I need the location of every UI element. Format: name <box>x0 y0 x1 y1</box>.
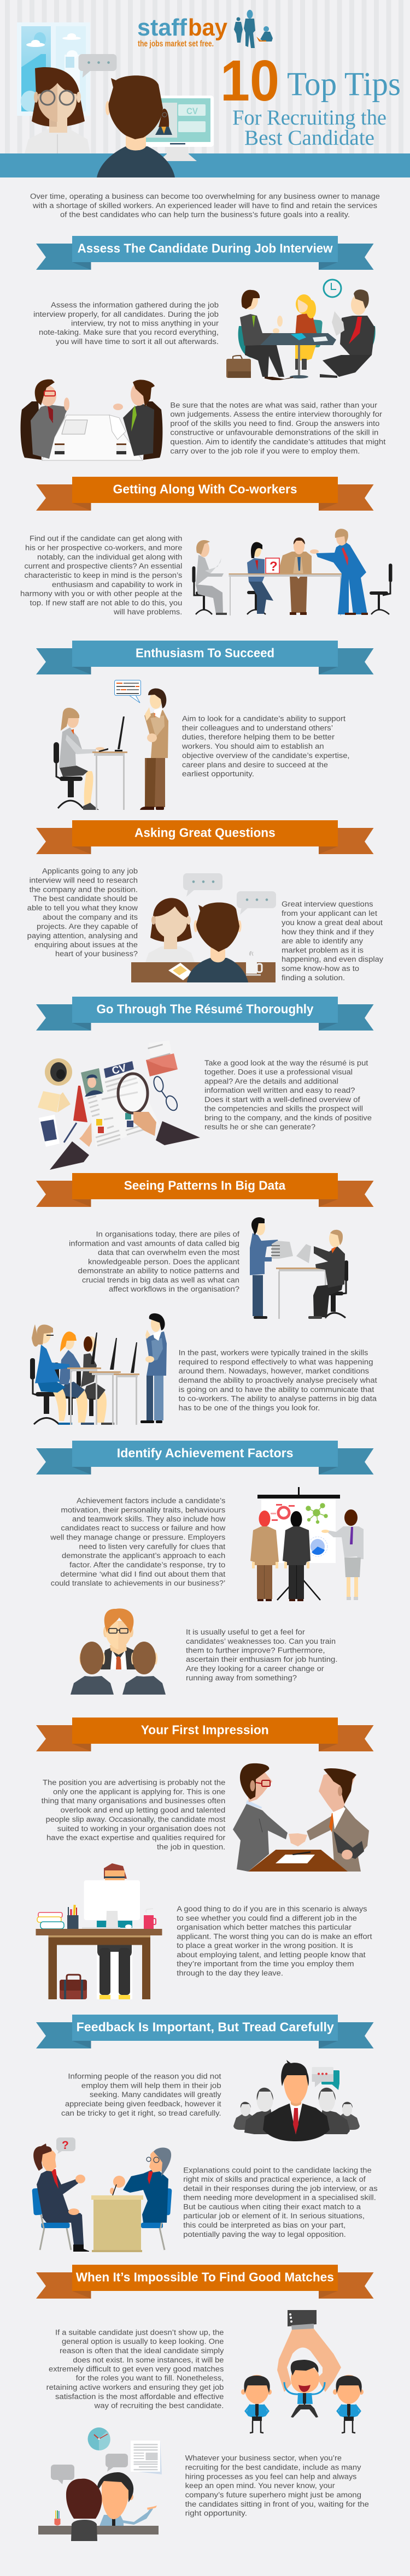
text: aim to look for: their colleagues and to understand others’ <box>182 724 333 732</box>
text: informing people: can be tricky to get it right, so tread carefully. <box>61 2109 221 2117</box>
illustration: two men at a table, top view <box>21 380 162 460</box>
title <box>220 49 401 150</box>
text: take a good look: information well written and easy to read? <box>204 1086 355 1094</box>
text: be sure that the notes: question. Aim to identify the candidate’s attitudes that might <box>170 438 386 446</box>
text: be sure that the notes: Be sure that the notes are what was said, rather than your <box>170 401 378 410</box>
illustration: man handing documents to seated man <box>250 1217 348 1319</box>
chart: green network <box>306 1503 327 1524</box>
text: applicants going to any job <box>27 867 138 958</box>
icon: coffee cup <box>45 1058 72 1086</box>
heading banner: Asking Great Questions: Asking Great Questions <box>134 826 276 840</box>
text: a good thing to do: organisation which better matches this particular <box>177 1923 352 1931</box>
text: whatever your business sector: company’s future superhero might just be among <box>185 2491 361 2499</box>
text: find out if the candidate: top. If new staff are not able to do this, you <box>30 599 182 607</box>
icon: briefcase <box>60 1975 87 1999</box>
text: the position you are advertising: the job in question. <box>157 1843 225 1851</box>
text: informing people: appreciate being given feedback, however it <box>65 2100 221 2108</box>
text: be sure that the notes: own judgements. Assess the entire interview thoroughly for <box>170 410 383 418</box>
text: the position you are advertising: thing that many organisations and businesses often <box>42 1797 225 1805</box>
text: aim to look for: earliest opportunity. <box>182 770 254 778</box>
text: find out if the candidate: enthusiasm and capability to work in <box>52 581 182 589</box>
speech bubble <box>51 2465 74 2484</box>
text: whatever your business sector: hiring processes as you feel can help and always <box>185 2473 357 2480</box>
text: aim to look for: workers. You should aim to establish an <box>181 742 324 750</box>
text: find out if the candidate: Find out if the candidate can get along with <box>30 534 182 543</box>
speech bubble <box>106 2454 128 2472</box>
text: achievement factors include: and teamwork skills. They also include how <box>72 1515 226 1523</box>
heading banner: Identify Achievement Factors <box>36 1441 374 1474</box>
text: great interview questions: how they think and if they <box>282 928 374 936</box>
text: find out if the candidate: notably, can the individual get along with <box>37 553 182 561</box>
text: applicants going to any job: about the company and its <box>43 913 138 921</box>
text: it is usually useful: candidates’ weaknesses too. Can you train <box>186 1637 336 1645</box>
text: in organisations today: information and vast amounts of data called big <box>69 1240 239 1247</box>
text: assess the information <box>33 301 219 346</box>
heading banner: Getting Along With Co-workers <box>36 477 374 511</box>
text: take a good look: appeal? Are the details and additional <box>204 1077 338 1086</box>
text: great interview questions: you know a great deal about <box>282 919 383 927</box>
text: in organisations today: knowledgeable person. Does the applicant <box>88 1258 239 1266</box>
text: if a suitable candidate: satisfaction is the most affordable and effective <box>55 2393 224 2401</box>
text: whatever your business sector: right opportunity. <box>185 2509 247 2518</box>
hero speech bubble <box>79 54 117 78</box>
text: take a good look: together. Does it use a professional visual <box>204 1068 353 1076</box>
text: find out if the candidate: current and prospective clients? An essential <box>24 562 182 570</box>
text: great interview questions: happening, and even display <box>282 955 383 963</box>
title: For Recruiting the <box>232 106 386 129</box>
text: find out if the candidate: his or her prospective co-workers, and more <box>25 544 182 552</box>
hero woman interviewer <box>25 67 90 153</box>
illustration: man with glasses facing two candidates <box>71 1608 166 1695</box>
center person <box>284 2360 325 2418</box>
text: applicants going to any job: enquiring about issues at the <box>34 940 138 949</box>
text: it is usually useful: Are they looking for a career change or <box>186 1665 324 1673</box>
text: applicants going to any job: interview will need to research <box>30 876 138 885</box>
text: the position you are advertising: overlook and end up letting good and talented <box>60 1806 225 1814</box>
text: assess the information: note-taking. Make sure that you record everything, <box>39 328 219 336</box>
chart: blue pie <box>308 1537 327 1556</box>
chairs and lower bodies <box>30 1358 102 1424</box>
text: applicants going to any job: Applicants going to any job <box>42 867 138 875</box>
text: take a good look: results he or she can generate? <box>204 1123 315 1131</box>
text: if a suitable candidate <box>46 2329 224 2409</box>
illustration: man behind monitor at desk <box>36 1863 162 1999</box>
text: a good thing to do: A good thing to do if you are in this scenario is always <box>177 1905 367 1913</box>
icon: magnifier <box>118 1074 148 1116</box>
text: find out if the candidate: will have problems. <box>113 608 182 616</box>
text: explanations could point: potentially paving the way to legal opposition. <box>183 2230 346 2239</box>
icon: document <box>131 2441 162 2474</box>
text: a good thing to do: through to the day they leave. <box>177 1969 283 1977</box>
icon: stack of books <box>37 1912 64 1929</box>
text: great interview questions: from your applicant can let <box>282 909 377 917</box>
text: it is usually useful: them to further improve? Furthermore, <box>186 1646 325 1655</box>
illustration: team with leader <box>233 2060 360 2141</box>
text: explanations could point: Explanations could point to the candidate lacking the <box>183 2166 372 2175</box>
illustration: woman at desk with standing man <box>54 680 168 810</box>
text: the position you are advertising <box>42 1778 226 1851</box>
text: explanations could point: detail in their responses during the job interview, or as <box>183 2184 378 2193</box>
text: take a good look <box>204 1059 372 1131</box>
text: whatever your business sector: Whatever your business sector, when you’re <box>185 2454 342 2462</box>
icon: mug <box>55 443 65 454</box>
text: explanations could point: them needing more development in a specialised skill. <box>183 2193 376 2202</box>
text: in organisations today: crucial trends in big data as well as what can <box>82 1276 239 1284</box>
icon: cv header: CV <box>110 1062 128 1077</box>
text: the position you are advertising: only one the applicant is applying for. This is one <box>53 1788 225 1796</box>
text: in the past: around them. Nowadays, however, market conditions <box>179 1367 369 1375</box>
icon: envelope <box>146 1040 178 1076</box>
speech bubble question mark <box>56 2137 75 2154</box>
text: find out if the candidate: harmony with you or with other people at the <box>20 590 182 597</box>
text: explanations could point: this could be interpreted as bias on your part, <box>183 2221 345 2229</box>
text: the position you are advertising: have the exact expertise and qualities required for <box>46 1834 226 1841</box>
hero man from behind <box>97 75 175 177</box>
text: in the past: has to be one of the things you look for. <box>179 1404 320 1412</box>
text: if a suitable candidate: extremely difficult to get even very good matches <box>49 2365 224 2373</box>
intro text: Over time, operating a business can become too overwhelming for any business owner to manage <box>30 192 380 200</box>
text: in the past: In the past, workers were typically trained in the skills <box>179 1349 368 1357</box>
text: a good thing to do: they’re important from the time you employ them <box>177 1959 354 1968</box>
logo: staffbay <box>137 10 273 49</box>
hero window <box>17 22 90 116</box>
side person left <box>241 2375 272 2433</box>
illustration: office conversation with clock and document <box>38 2427 162 2541</box>
chart: red ring <box>271 1504 295 1521</box>
text: a good thing to do: to place a great worker in the wrong position. It is <box>177 1941 353 1950</box>
text: in organisations today: affect workflows in the organisation? <box>109 1285 239 1293</box>
text: achievement factors include: need to listen very carefully for clues that <box>79 1542 226 1551</box>
text: whatever your business sector: keep an open mind. You never know, your <box>185 2482 335 2490</box>
text: if a suitable candidate: way of recruiting the best candidate. <box>94 2402 224 2409</box>
text: achievement factors include: Achievement factors include a candidate’s <box>77 1496 226 1505</box>
text: the position you are advertising: The position you are advertising is probably not the <box>43 1778 225 1787</box>
text: if a suitable candidate: If a suitable candidate just doesn’t show up, the <box>55 2329 224 2336</box>
text: take a good look: bring to the company, and the kinds of positive <box>204 1114 372 1122</box>
text: in the past: to co-workers. The ability to analyse patterns in big data <box>179 1395 377 1402</box>
text: a good thing to do: to see whether you could find a different job in the <box>177 1914 357 1922</box>
text: in organisations today: In organisations today, there are piles of <box>96 1230 239 1239</box>
text: the position you are advertising: suited to working in your organisation does not <box>57 1825 226 1833</box>
icon: folded papers <box>38 1091 71 1112</box>
intro text: with a shortage of skilled workers. An experienced leader will have to find and retain the services <box>32 202 377 210</box>
text: achievement factors include: demonstrate the applicant’s approach to each <box>62 1551 225 1560</box>
heading banner: Seeing Patterns In Big Data <box>36 1173 374 1207</box>
text: take a good look: the competencies and skills the prospect will <box>204 1104 363 1113</box>
chat bubbles <box>312 2067 339 2090</box>
text: be sure that the notes: carry over to the job role if you were to employ them. <box>170 447 360 455</box>
heading banner: Feedback Is Important, But Tread Carefully: Feedback Is Important, But Tread Carefully <box>77 2020 334 2034</box>
text: aim to look for <box>181 714 350 778</box>
text: explanations could point: particular job or element of it. In serious situations, <box>183 2212 365 2220</box>
text: in the past: is going on and to have the ability to communicate that <box>179 1385 374 1394</box>
text: aim to look for: Aim to look for a candidate’s ability to support <box>182 714 345 723</box>
text: aim to look for: career plans and desire to succeed at the <box>182 761 328 769</box>
heading banner: When It’s Impossible To Find Good Matches <box>36 2265 374 2299</box>
text: aim to look for: duties, therefore helping them to be better <box>182 733 335 741</box>
heading banner: Enthusiasm To Succeed: Enthusiasm To Succeed <box>136 646 274 660</box>
illustration: four people around a table with question sheet: ? <box>270 559 278 574</box>
icon: glasses <box>153 1075 179 1112</box>
text: assess the information: interview, try not to miss anything in your <box>71 319 219 328</box>
text: achievement factors include: candidates react to success or failure and how <box>61 1524 226 1532</box>
text: if a suitable candidate: reason is often that the ideal candidate simply <box>60 2347 224 2355</box>
text: applicants going to any job: heart of your business? <box>55 950 138 958</box>
speech bubble with lines <box>115 680 141 703</box>
text: in organisations today: demonstrate an ability to notice patterns and <box>78 1267 239 1275</box>
icon: cv header <box>104 1061 134 1078</box>
text: it is usually useful <box>186 1628 338 1682</box>
icon: pencil cup <box>55 2510 60 2525</box>
icon: tie <box>73 1086 87 1122</box>
text: informing people: seeking. Many candidates will greatly <box>90 2091 221 2099</box>
text: applicants going to any job: able to tell you what they know <box>27 904 138 912</box>
text: great interview questions <box>282 900 383 982</box>
illustration: handshake over table <box>233 1763 369 1872</box>
text: it is usually useful: running away from something? <box>186 1674 297 1682</box>
logo: staffbay: the jobs market set free. <box>138 39 214 49</box>
intro text: of the best candidates who can help turn the business’s future goals into a reality. <box>60 211 350 218</box>
text: the position you are advertising: people slip away. Occasionally, the candidate most <box>46 1815 226 1823</box>
illustration: interview across a podium <box>32 2137 172 2252</box>
illustration: hand lifting a happy candidate between two others <box>241 2310 364 2433</box>
text: take a good look: Does it start with a well-defined overview of <box>204 1095 360 1104</box>
icon: red mug <box>144 1909 156 1929</box>
illustration: presentation with three people <box>250 1487 364 1601</box>
text: it is usually useful: ascertain their enthusiasm for job hunting. <box>186 1655 338 1663</box>
illustration: four people around a table with question sheet <box>192 529 393 615</box>
text: whatever your business sector: recruiting for the best candidate, include as many <box>185 2463 361 2472</box>
heading banner: Your First Impression <box>36 1718 374 1751</box>
logo: staffbay: staff <box>137 14 187 41</box>
speech bubble question mark: ? <box>62 2139 69 2152</box>
text: achievement factors include <box>50 1496 226 1587</box>
text: if a suitable candidate: for the roles you want to fill. Nonetheless, <box>76 2374 224 2382</box>
text: great interview questions: some know-how as to <box>282 964 359 973</box>
icon: cv photo <box>81 1068 103 1097</box>
text: assess the information: interview properly, for all candidates. During the job <box>33 310 219 318</box>
heading banner: Feedback Is Important, But Tread Carefully <box>36 2015 374 2048</box>
heading banner: Asking Great Questions <box>36 820 374 854</box>
text: be sure that the notes <box>170 401 386 455</box>
text: achievement factors include: well they manage change or pressure. Employers <box>50 1533 226 1541</box>
text: be sure that the notes: proof of the skills you need to find. Group the answers into <box>170 419 379 428</box>
text: if a suitable candidate: general option is usually to keep looking. One <box>62 2337 224 2346</box>
side person right <box>333 2375 364 2433</box>
text: applicants going to any job: projects. Are they capable of <box>37 922 138 931</box>
text: in the past: required to respond effectively to what was happening <box>179 1358 373 1366</box>
text: a good thing to do: applicant. The worst thing you can do is make an effort <box>177 1932 372 1941</box>
heading banner: Go Through The Résumé Thoroughly <box>36 997 374 1031</box>
text: be sure that the notes: constructive or unfavourable demonstrations of the skill in <box>170 428 378 437</box>
intro text <box>30 192 380 218</box>
icon: phone <box>39 1115 60 1147</box>
hero counter <box>0 153 410 177</box>
icon: pencil cup <box>67 1905 79 1929</box>
text: applicants going to any job: paying attention, analysing and <box>27 932 138 940</box>
heading banner: Seeing Patterns In Big Data: Seeing Patterns In Big Data <box>124 1179 285 1193</box>
text: if a suitable candidate: does not exist. In some instances, it will be <box>73 2356 224 2364</box>
text: explanations could point: right mix of skills and practical experience, a lack of <box>183 2175 366 2183</box>
text: find out if the candidate <box>20 534 183 616</box>
text: in organisations today: data that can overwhelm even the most <box>98 1248 239 1257</box>
icon: mug <box>116 443 126 454</box>
text: informing people <box>61 2072 221 2117</box>
text: applicants going to any job: the company and the position. <box>30 886 138 893</box>
icon: wall clock <box>87 2427 110 2450</box>
text: applicants going to any job: The best candidate should be <box>33 895 138 903</box>
text: explanations could point <box>183 2166 378 2239</box>
text: assess the information: Assess the information gathered during the job <box>51 301 219 309</box>
heading banner: Your First Impression: Your First Impression <box>141 1722 269 1737</box>
illustration: resume flat lay with hands <box>38 1040 200 1170</box>
text: great interview questions: are able to identify any <box>282 937 363 945</box>
text: great interview questions: market problem as it is <box>282 946 364 955</box>
text: it is usually useful: It is usually useful to get a feel for <box>186 1628 305 1636</box>
heading banner: Assess The Candidate During Job Interview: Assess The Candidate During Job Interview <box>78 241 333 256</box>
illustration: three people meeting at a table <box>226 280 376 380</box>
text: informing people: Informing people of the reason you did not <box>68 2072 221 2081</box>
text: achievement factors include: motivation, their personality traits, behaviours <box>61 1506 226 1514</box>
text: a good thing to do <box>177 1905 372 1977</box>
text: achievement factors include: could translate to achievements in our business?’ <box>51 1579 225 1587</box>
illustration: three women at computers with supervisor <box>30 1313 167 1425</box>
hero monitor with CV: CV <box>186 106 198 116</box>
illustration: two people talking across a desk <box>131 873 276 982</box>
text: assess the information: you will have time to sort it all out afterwards. <box>56 337 219 346</box>
text: achievement factors include: factor. After the candidate’s response, try to <box>69 1561 225 1569</box>
title: 10 <box>220 49 279 113</box>
text: whatever your business sector: the candidates sitting in front of you, waiting for the <box>185 2500 369 2508</box>
text: great interview questions: Great interview questions <box>282 900 373 908</box>
speech bubble <box>237 891 276 915</box>
heading banner: When It’s Impossible To Find Good Matches: When It’s Impossible To Find Good Matches <box>76 2270 334 2284</box>
text: explanations could point: But be cautious when citing their exact match to a <box>183 2203 361 2211</box>
text: in organisations today <box>69 1230 239 1293</box>
heading banner: Go Through The Résumé Thoroughly: Go Through The Résumé Thoroughly <box>96 1002 314 1016</box>
text: take a good look: Take a good look at the way the résumé is put <box>204 1059 368 1067</box>
heading banner: Identify Achievement Factors: Identify Achievement Factors <box>117 1446 294 1460</box>
heading banner: Getting Along With Co-workers: Getting Along With Co-workers <box>113 482 297 496</box>
icon: coffee mug <box>246 951 262 975</box>
text: great interview questions: finding a solution. <box>282 974 345 982</box>
text: whatever your business sector <box>185 2454 369 2518</box>
text: aim to look for: objective overview of the candidate’s expertise, <box>182 751 350 760</box>
text: achievement factors include: determine ‘what did I find out about them that <box>60 1570 226 1578</box>
hero monitor with CV <box>137 96 214 161</box>
text: informing people: employ them will help them in their job <box>81 2082 221 2089</box>
heading banner: Assess The Candidate During Job Interview <box>36 236 374 270</box>
speech bubble <box>183 873 222 897</box>
desks and monitors <box>67 1333 139 1425</box>
panel: hero header <box>0 0 410 177</box>
icon: pen <box>64 1123 77 1142</box>
text: if a suitable candidate: retaining active workers and ensuring they get job <box>46 2383 224 2391</box>
heading banner: Enthusiasm To Succeed <box>36 641 374 674</box>
text: a good thing to do: about employing talent, and letting people know that <box>177 1951 366 1959</box>
logo silhouettes <box>234 10 273 48</box>
text: in the past <box>179 1349 377 1412</box>
title: Best Candidate <box>244 126 374 150</box>
title: Top Tips <box>287 66 401 103</box>
logo: staffbay: bay <box>188 14 227 41</box>
text: in the past: demand the ability to proactively analyse precisely what <box>179 1376 377 1384</box>
text: find out if the candidate: characteristic to keep in mind is the person’s <box>24 571 183 579</box>
